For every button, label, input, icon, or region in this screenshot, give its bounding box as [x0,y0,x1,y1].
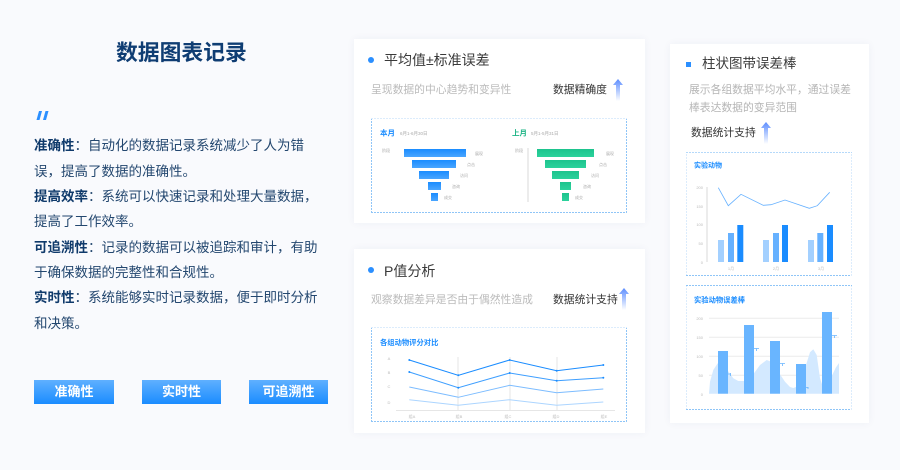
description: 展示各组数据平均水平，通过误差 [689,84,851,96]
heading: P值分析 [384,263,435,279]
chart: bars with error bars and area: 150 [696,335,704,340]
chart frame [371,327,627,422]
text block: benefits: 提高了工作效率。 [34,214,142,229]
description: 观察数据差异是否由于偶然性造成 [371,294,533,306]
button: 可追溯性 [249,380,328,404]
line chart: group scores: 各组动物评分对比 [380,338,438,347]
text block: benefits: 和决策。 [34,316,88,331]
text block: benefits: 实时性：系统能够实时记录数据，便于即时分析 [34,290,318,305]
funnel chart: this month and last month: 本月 [380,128,395,138]
line chart: group scores: 组B [456,413,463,419]
description: 棒表达数据的变异范围 [689,102,797,114]
line chart: group scores [380,338,615,419]
icon: up arrow [613,79,623,100]
description [689,84,851,114]
funnel chart: this month and last month: 成交 [575,194,583,200]
funnel chart: this month and last month: 6月1-6月30日 [400,131,428,137]
panel: mean and standard error [354,39,645,223]
funnel chart: this month and last month: 上月 [512,128,527,138]
description: 呈现数据的中心趋势和变异性 [371,84,511,96]
heading: 平均值±标准误差 [384,52,490,68]
line chart: group scores: B [388,370,391,375]
chart: grouped bars and line: 50 [699,241,704,246]
funnel chart: this month and last month: 点击 [467,161,475,167]
button: 实时性: 实时性 [162,384,201,399]
text block: benefits [34,138,318,331]
text block: benefits: 提高效率：系统可以快速记录和处理大量数据， [34,189,318,204]
chart: bars with error bars and area: 实验动物误差棒 [694,296,746,304]
funnel chart: this month and last month: 咨询 [452,183,460,189]
chart: bars with error bars and area: 100 [696,354,704,359]
chart: grouped bars and line: 1月 [728,266,734,271]
text block: benefits: 准确性：自动化的数据记录系统减少了人为错 [34,138,304,153]
icon: quote mark [36,111,48,120]
line chart: group scores: 组D [553,413,560,419]
bullet [686,62,691,66]
panel: bar chart with error bars [670,44,869,423]
key label: 数据精确度 [553,84,607,96]
icon: up arrow [619,288,629,309]
funnel chart: this month and last month: 5月1-5月31日 [531,131,559,137]
line chart: group scores: C [388,384,391,389]
chart: grouped bars and line [694,160,833,271]
chart: grouped bars and line: 100 [696,222,704,227]
chart: grouped bars and line: 200 [696,185,704,190]
heading: 柱状图带误差棒 [702,56,796,71]
button: 准确性 [34,380,114,404]
funnel chart: this month and last month: 阶段 [515,147,523,153]
line chart: group scores: 组C [505,413,512,419]
funnel chart: this month and last month: 访问 [460,172,468,178]
funnel chart: this month and last month [380,128,614,202]
funnel chart: this month and last month: 访问 [591,172,599,178]
button: 实时性 [142,380,221,404]
chart: bars with error bars and area: 50 [699,373,704,378]
chart: bars with error bars and area: 0 [701,392,704,397]
icon: up arrow [761,122,771,143]
key label: 数据统计支持 [691,127,756,139]
funnel chart: this month and last month: 咨询 [583,183,591,189]
text block: benefits: 于确保数据的完整性和合规性。 [34,265,223,280]
line chart: group scores: D [388,400,391,405]
funnel chart: this month and last month: 展现 [606,150,614,156]
line chart: group scores: A [388,356,391,361]
button: 可追溯性: 可追溯性 [262,384,314,399]
title: 数据图表记录 [116,40,247,65]
chart: grouped bars and line: 0 [701,260,704,265]
bullet [368,57,374,63]
panel: P value analysis [354,249,645,433]
text block: benefits: 误，提高了数据的准确性。 [34,164,196,179]
key label: 数据统计支持 [553,294,618,306]
line chart: group scores: 组E [601,413,608,419]
funnel chart: this month and last month: 阶段 [382,147,390,153]
funnel chart: this month and last month: 成交 [444,194,452,200]
chart: grouped bars and line: 150 [696,204,704,209]
bullet [368,267,374,273]
chart frame: error bars [686,285,852,410]
chart: bars with error bars and area [694,296,839,397]
line chart: group scores: 组A [409,413,416,419]
button: 准确性: 准确性 [54,384,94,399]
funnel chart: this month and last month: 点击 [599,161,607,167]
chart frame [371,118,627,213]
funnel chart: this month and last month: 展现 [475,150,483,156]
chart: grouped bars and line: 实验动物 [694,160,722,170]
chart frame: experimental animals [686,152,852,276]
chart: bars with error bars and area: 200 [696,316,704,321]
chart: grouped bars and line: 3月 [818,266,824,271]
chart: grouped bars and line: 2月 [773,266,779,271]
text block: benefits: 可追溯性：记录的数据可以被追踪和审计，有助 [34,240,318,255]
